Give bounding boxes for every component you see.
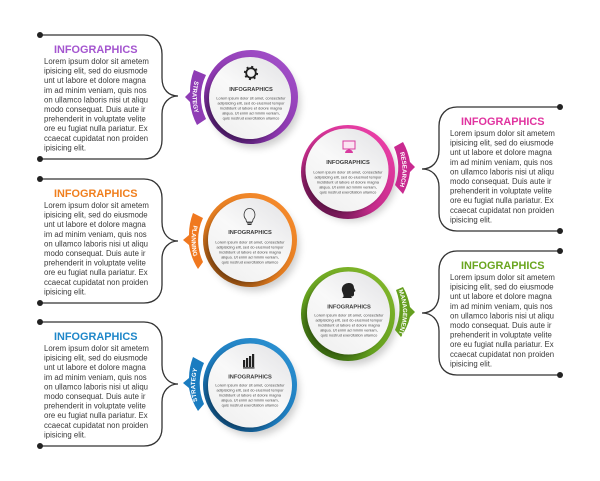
circle text: purple: incididunt ut labore et dolore magna [220,106,283,110]
panel: orange text bracket [37,176,178,306]
ribbon: research pink: RESEARCH [400,152,407,188]
text block: green: modo consequat. Duis aute ir [450,321,552,330]
panel: green text bracket [422,248,563,378]
circle text: purple: quis nostrud exercitation ullamco [223,116,279,120]
panel: blue text bracket [37,319,178,449]
panel: green circle [301,267,415,368]
circle text: pink: aliqua. Ut enim ad minim veniam, [319,184,377,190]
icon: light bulb [244,208,255,224]
ribbon: strategy purple: STRATEGY [192,81,199,112]
circle text: green: incididunt ut labore et dolore magna [318,322,381,328]
panel: blue circle [183,338,302,440]
text block: purple: im ad minim veniam, quis nos [44,86,147,95]
circle text: green: Lorem ipsum dolor sit amet, consectetur [314,312,384,318]
text block: purple: ccaecat cupidatat non proiden [44,134,148,143]
text block: pink: ipisicing elit, sed do eiusmode [450,139,554,148]
heading: orange: INFOGRAPHICS [54,188,138,200]
circle text: purple: aliqua. Ut enim ad minim veniam, [222,110,280,116]
icon: monitor [343,141,355,153]
ribbon: management green: MANAGEMENT [398,289,408,335]
text block: blue: prehenderit in voluptate velite [44,402,146,411]
ribbon: planning orange: PLANNING [192,226,198,256]
circle text: blue: quis nostrud exercitation ullamco [222,402,278,408]
panel: pink circle [301,125,415,224]
icon: head silhouette [342,283,356,298]
heading: green: INFOGRAPHICS [461,260,544,272]
text block: pink: Lorem ipsum dolor sit ametem [450,129,555,138]
circle text: blue: aliqua. Ut enim ad minim veniam, [221,398,279,402]
text block: blue: im ad minim veniam, quis nos [44,373,147,382]
text block: green: on ullamco laboris nisi ut aliqu [450,311,554,320]
text block: blue: Lorem ipsum dolor sit ametem [44,344,149,353]
circle text: orange: incididunt ut labore et dolore magna [219,250,282,254]
text block: orange: ore eu fugiat nulla pariatur. Ex [44,268,148,277]
text block: orange: Lorem ipsum dolor sit ametem [44,201,149,210]
heading: blue: INFOGRAPHICS [54,331,138,343]
text block: green: ipisicing elit. [450,359,492,368]
text block: blue: ipisicing elit. [44,430,86,439]
text block: pink: prehenderit in voluptate velite [450,187,552,196]
circle text: pink: Lorem ipsum dolor sit amet, consectetur [313,170,383,174]
text block: purple: unt ut labore et dolore magna [44,76,147,85]
text block: blue: ipisicing elit, sed do eiusmode [44,354,148,363]
text block: purple: prehenderit in voluptate velite [44,115,146,124]
text block: orange: prehenderit in voluptate velite [44,259,146,268]
heading: pink: INFOGRAPHICS [461,116,544,128]
circle text: blue: Lorem ipsum dolor sit amet, consectetur [215,382,285,388]
text block: green: ipisicing elit, sed do eiusmode [450,283,554,292]
text block: pink: on ullamco laboris nisi ut aliqu [450,167,554,176]
circle text: orange: adipisicing elit, sed do eiusmod tempor [216,244,284,250]
circle text: green: aliqua. Ut enim ad minim veniam, [320,328,378,332]
text block: purple: Lorem ipsum dolor sit ametem [44,57,149,66]
circle title: orange: INFOGRAPHICS [228,230,272,236]
circle text: green: quis nostrud exercitation ullamco [321,332,377,338]
circle text: green: adipisicing elit, sed do eiusmod tempor [315,318,383,322]
circle text: purple: Lorem ipsum dolor sit amet, consectetur [216,96,286,100]
text block: blue: on ullamco laboris nisi ut aliqu [44,382,148,391]
text block: purple: on ullamco laboris nisi ut aliqu [44,95,148,104]
circle text: pink: adipisicing elit, sed do eiusmod tempor [314,174,382,180]
icon: bar chart [243,354,254,368]
text block: blue: ccaecat cupidatat non proiden [44,421,148,430]
text block: pink: unt ut labore et dolore magna [450,148,553,157]
icon: gear [245,67,257,79]
text block: purple: ore eu fugiat nulla pariatur. Ex [44,124,148,133]
panel: pink text bracket [422,104,563,234]
circle text: pink: incididunt ut labore et dolore magna [317,180,380,184]
text block: green: ore eu fugiat nulla pariatur. Ex [450,340,554,349]
text block: orange: ipisicing elit, sed do eiusmode [44,211,148,220]
text block: pink: ore eu fugiat nulla pariatur. Ex [450,196,554,205]
text block: green: prehenderit in voluptate velite [450,331,552,340]
panel: purple text bracket [37,32,178,162]
text block: purple: ipisicing elit, sed do eiusmode [44,67,148,76]
text block: green: ccaecat cupidatat non proiden [450,350,554,359]
text block: green: Lorem ipsum dolor sit ametem [450,273,555,282]
text block: pink: ipisicing elit. [450,215,492,224]
text block: pink: modo consequat. Duis aute ir [450,177,552,186]
text block: green: unt ut labore et dolore magna [450,292,553,301]
circle text: orange: Lorem ipsum dolor sit amet, consectetur [215,240,285,244]
text block: orange: im ad minim veniam, quis nos [44,230,147,239]
text block: blue: unt ut labore et dolore magna [44,363,147,372]
circle text: pink: quis nostrud exercitation ullamco [320,190,376,194]
text block: orange: on ullamco laboris nisi ut aliqu [44,239,148,248]
text block: green: im ad minim veniam, quis nos [450,302,553,311]
circle title: green: INFOGRAPHICS [327,304,371,310]
text block: orange: unt ut labore et dolore magna [44,220,147,229]
text block: blue: modo consequat. Duis aute ir [44,392,146,401]
text block: orange: ccaecat cupidatat non proiden [44,278,148,287]
circle title: blue: INFOGRAPHICS [228,374,272,380]
circle text: purple: adipisicing elit, sed do eiusmod tempor [217,100,285,106]
text block: orange: modo consequat. Duis aute ir [44,249,146,258]
circle text: blue: adipisicing elit, sed do eiusmod tempor [216,388,284,392]
text block: purple: ipisicing elit. [44,143,86,152]
text block: pink: im ad minim veniam, quis nos [450,158,553,167]
text block: pink: ccaecat cupidatat non proiden [450,206,554,215]
text block: blue: ore eu fugiat nulla pariatur. Ex [44,411,148,420]
ribbon: strategy blue: STRATEGY [190,368,198,402]
circle text: orange: quis nostrud exercitation ullamco [222,260,278,264]
circle text: blue: incididunt ut labore et dolore magna [219,392,282,398]
text block: orange: ipisicing elit. [44,287,86,296]
panel: purple circle [185,50,304,152]
circle title: purple: INFOGRAPHICS [229,87,273,93]
panel: orange circle [183,193,302,294]
circle title: pink: INFOGRAPHICS [326,160,370,166]
heading: purple: INFOGRAPHICS [54,44,138,56]
circle text: orange: aliqua. Ut enim ad minim veniam, [221,254,279,260]
text block: purple: modo consequat. Duis aute ir [44,105,146,114]
